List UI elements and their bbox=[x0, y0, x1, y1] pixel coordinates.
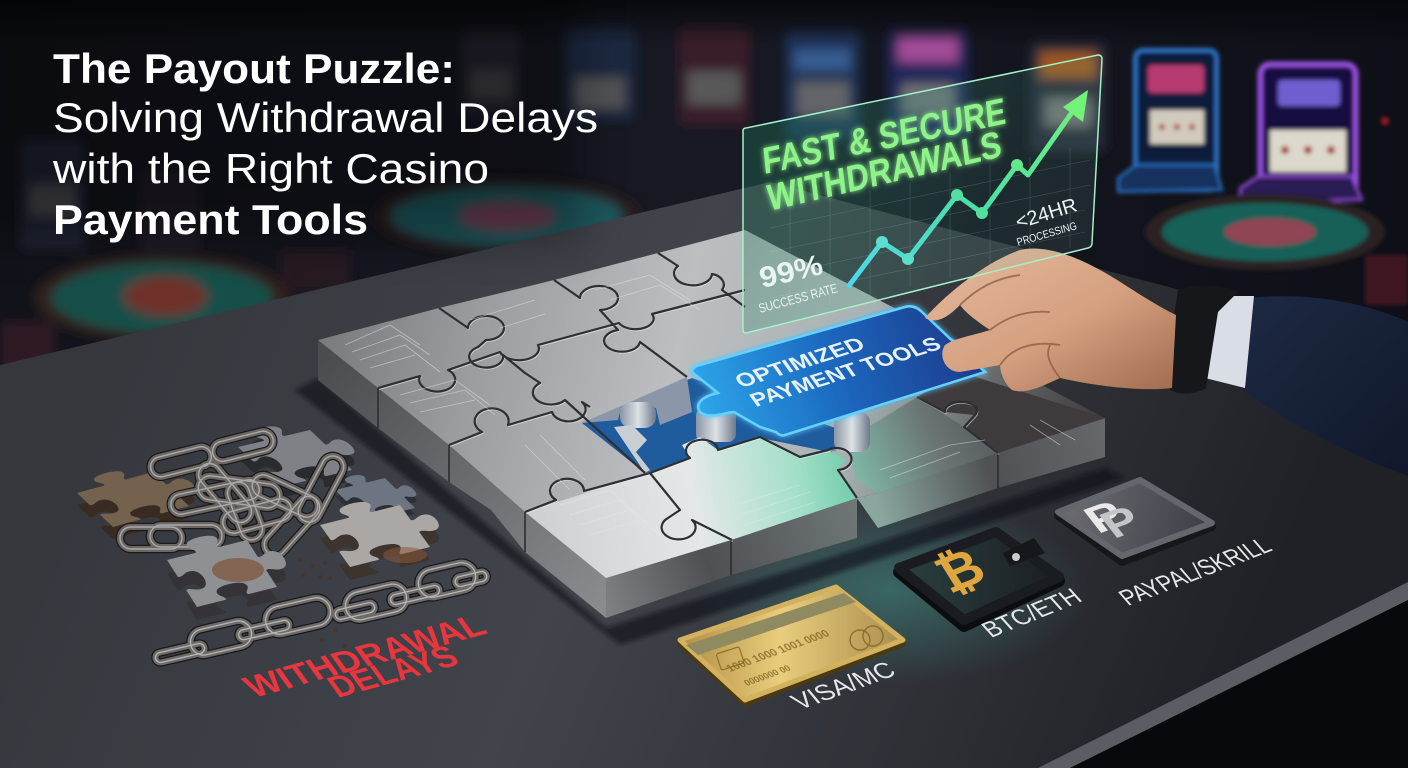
label: optimized payment tools: OPTIMIZED bbox=[730, 333, 870, 392]
icon: bitcoin wallet: ₿ bbox=[924, 537, 996, 605]
shirt cuff bbox=[1205, 296, 1254, 388]
chart grid bbox=[770, 148, 1090, 315]
stat: 99% success rate bbox=[756, 249, 839, 316]
icon: paypal tile: P bbox=[1090, 497, 1151, 546]
hand bbox=[925, 249, 1176, 391]
piece: rusty right bbox=[312, 488, 452, 580]
top face bbox=[318, 230, 1105, 578]
heading: fast and secure withdrawals: FAST & SECURE bbox=[761, 89, 1008, 182]
blue optimized payment tools piece bbox=[692, 306, 985, 435]
label: withdrawal delays: DELAYS bbox=[321, 639, 466, 705]
label: withdrawal delays: WITHDRAWAL bbox=[237, 608, 494, 705]
broken chain bbox=[155, 558, 488, 663]
icon: paypal tile bbox=[1058, 480, 1212, 562]
label: btc/eth: BTC/ETH bbox=[977, 584, 1088, 643]
tangled links bbox=[120, 429, 348, 560]
piece: grey top bbox=[226, 414, 372, 498]
puzzle board of steel pieces bbox=[295, 230, 1125, 645]
stat: under 24hr processing: PROCESSING bbox=[1016, 220, 1078, 249]
icon: bitcoin wallet bbox=[899, 532, 1059, 626]
broken puzzle pieces and tangled chains bbox=[67, 414, 452, 620]
title backdrop bbox=[0, 0, 580, 240]
line chart with arrow bbox=[848, 90, 1088, 287]
engraved circuit traces bbox=[345, 275, 1075, 545]
side faces bbox=[318, 340, 606, 618]
stat: 99% success rate: SUCCESS RATE bbox=[757, 280, 839, 316]
hole with blue floor bbox=[582, 377, 870, 473]
jigsaw seams bbox=[378, 253, 999, 542]
bright front pieces bbox=[525, 437, 857, 578]
title: The Payout Puzzle: bbox=[53, 45, 455, 92]
watch bbox=[1170, 285, 1238, 394]
blue slot bbox=[1135, 50, 1217, 190]
label: paypal/skrill: PAYPAL/SKRILL bbox=[1114, 534, 1278, 611]
suit sleeve bbox=[1240, 296, 1408, 476]
hologram panel bbox=[743, 55, 1102, 333]
suit sleeve, cuff, watch and hand bbox=[925, 249, 1408, 476]
title bbox=[52, 45, 598, 243]
piece: rusty brown bbox=[67, 457, 210, 539]
title: Solving Withdrawal Delays bbox=[53, 94, 598, 141]
dark right pieces bbox=[917, 372, 1105, 453]
stat: under 24hr processing: <24HR bbox=[1013, 194, 1080, 234]
title: Payment Tools bbox=[53, 196, 368, 243]
blurred casino background bbox=[0, 0, 1408, 400]
title: with the Right Casino bbox=[52, 145, 489, 192]
icon: gold credit card bbox=[680, 587, 903, 704]
icon: paypal tile: P bbox=[1074, 492, 1135, 541]
roulette tables bbox=[34, 254, 290, 342]
icon: gold credit card: 0000000 00 bbox=[742, 663, 793, 688]
stat: 99% success rate: 99% bbox=[756, 249, 826, 295]
table surface bbox=[0, 182, 1408, 768]
slot machines bbox=[20, 26, 750, 250]
heading: fast and secure withdrawals: WITHDRAWALS bbox=[765, 122, 1004, 219]
piece: grey front bbox=[159, 522, 299, 620]
piece: blue grey bbox=[327, 466, 429, 526]
label: visa/mc: VISA/MC bbox=[786, 658, 902, 715]
label: optimized payment tools: PAYMENT TOOLS bbox=[745, 333, 946, 411]
purple slot bbox=[1260, 64, 1356, 194]
icon: gold credit card: 1000 1000 1001 0000 bbox=[724, 628, 832, 674]
